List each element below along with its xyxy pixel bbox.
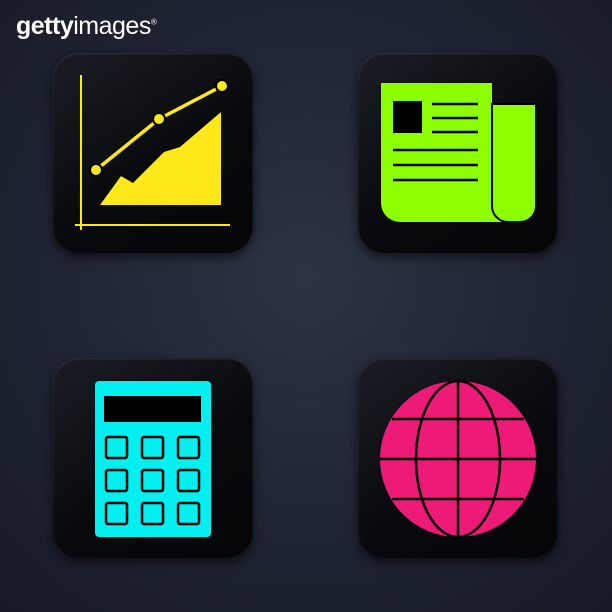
icon: calculator bbox=[95, 381, 211, 537]
panel: chart button bbox=[53, 53, 253, 253]
panel: newspaper button bbox=[358, 53, 558, 253]
icon: line chart bbox=[75, 75, 230, 230]
panel: calculator button bbox=[53, 358, 253, 558]
panel: globe button bbox=[358, 358, 558, 558]
icon: globe bbox=[380, 381, 536, 537]
logo: gettyimages: gettyimages® bbox=[16, 12, 156, 40]
icon: newspaper bbox=[381, 83, 536, 222]
